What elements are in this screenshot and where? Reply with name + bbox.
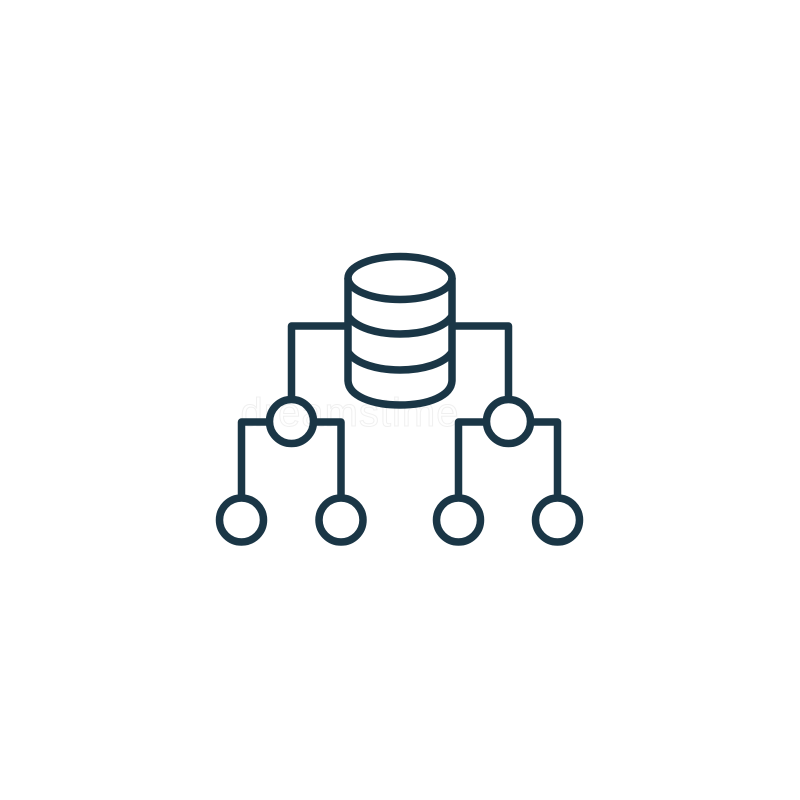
connector: database to right node	[452, 326, 508, 397]
connector: right node to its leaves	[458, 422, 558, 495]
icon: network tree	[220, 256, 580, 542]
node: leaf 1	[220, 498, 264, 542]
node: leaf 3	[436, 498, 480, 542]
icon: database cylinder	[348, 256, 452, 405]
watermark: dreamstime	[241, 391, 459, 435]
connector: left node to its leaves	[242, 422, 341, 495]
node: left branch	[270, 400, 314, 444]
connector: database to left node	[292, 326, 348, 397]
node: leaf 4	[536, 498, 580, 542]
node: leaf 2	[319, 498, 363, 542]
node: right branch	[486, 400, 530, 444]
